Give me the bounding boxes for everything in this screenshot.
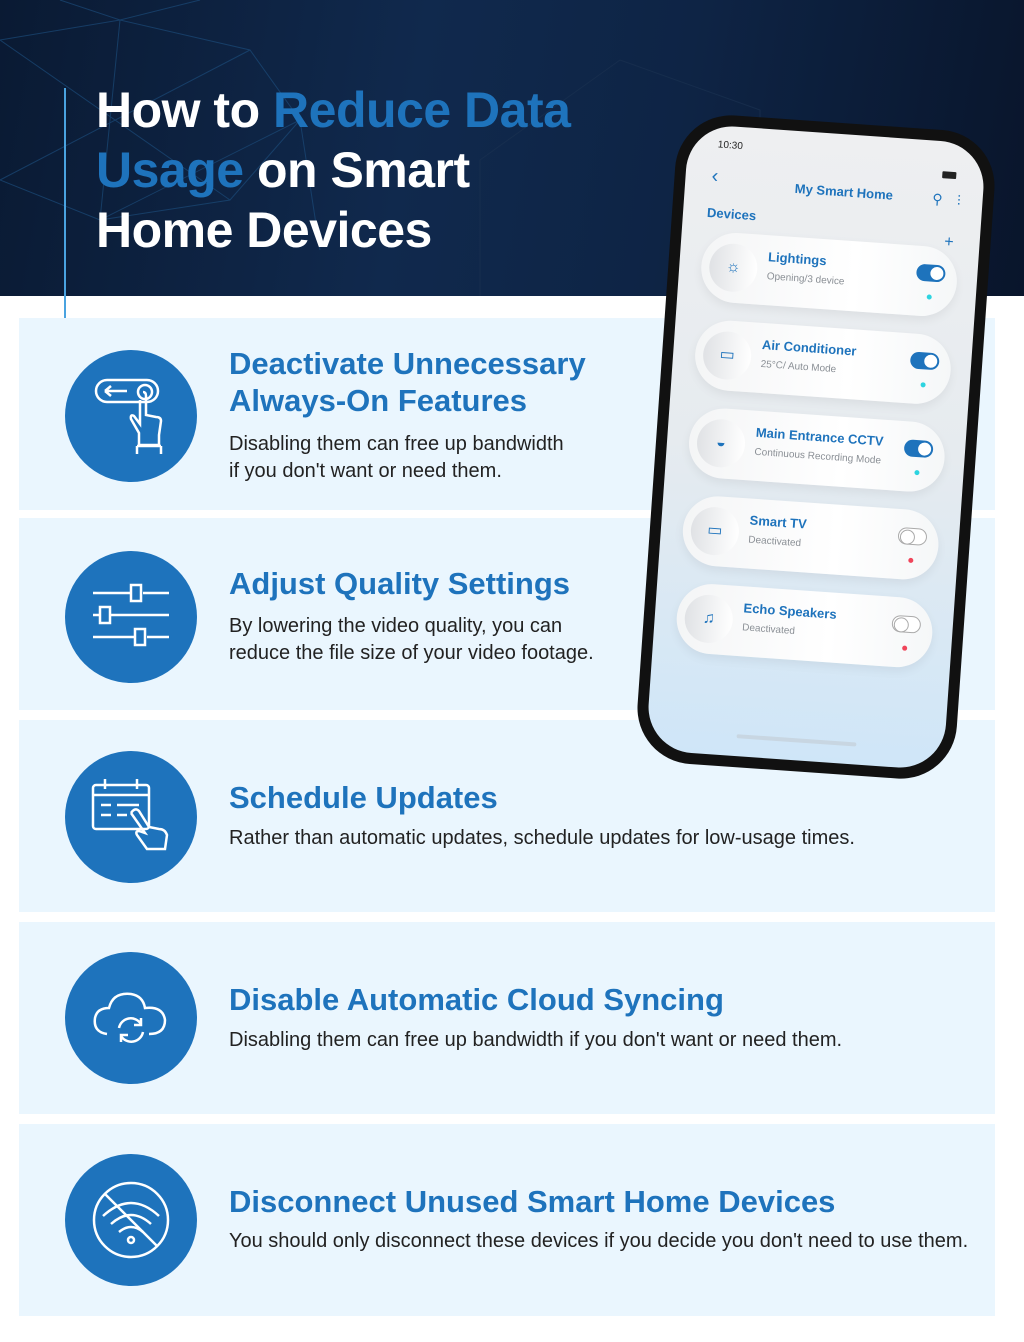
title: [96, 82, 572, 258]
heading: Disconnect Unused Smart Home Devices: [229, 1184, 835, 1219]
device cards: ☼: [725, 258, 741, 276]
device cards: Opening/3 device: [766, 271, 845, 288]
panel: quality settings: [19, 518, 995, 710]
panel: disconnect devices: [19, 1124, 995, 1316]
timeline line: [64, 88, 66, 328]
phone mockup: ▭: [719, 346, 735, 364]
phone mockup: Deactivated: [748, 535, 801, 549]
title: Usage on Smart: [96, 142, 470, 198]
text: Disabling them can free up bandwidth if you don't want or need them.: [229, 1029, 842, 1051]
phone mockup: My Smart Home: [794, 181, 893, 203]
text: By lowering the video quality, you can: [229, 615, 562, 637]
icon: no wifi: [65, 1154, 197, 1286]
phone mockup: ▭: [707, 522, 723, 540]
icon: calendar hand: [65, 751, 197, 883]
title: How to Reduce Data: [96, 82, 570, 138]
panel: schedule updates: [19, 720, 995, 912]
phone mockup: Deactivated: [742, 622, 795, 637]
phone mockup: +: [944, 233, 954, 251]
text: if you don't want or need them.: [229, 460, 502, 482]
device cards: Lightings: [768, 249, 827, 268]
header background: [0, 0, 1024, 296]
phone mockup: Smart TV: [749, 513, 807, 532]
phone mockup: Devices: [707, 205, 757, 223]
title: Home Devices: [96, 202, 432, 258]
status bar: 10:30: [717, 139, 743, 152]
heading: [229, 346, 586, 418]
text: Rather than automatic updates, schedule updates for low-usage times.: [229, 827, 855, 849]
heading: Schedule Updates: [229, 780, 498, 815]
phone mockup: [634, 112, 998, 782]
icon: cloud sync: [65, 952, 197, 1084]
panel: deactivate features: [19, 318, 995, 510]
phone mockup: Continuous Recording Mode: [754, 447, 881, 467]
heading: Always-On Features: [229, 383, 527, 418]
icon: hand toggle: [65, 350, 197, 482]
phone mockup: ⫶: [956, 192, 961, 208]
text: You should only disconnect these devices if you decide you don't need to use them.: [229, 1230, 968, 1252]
heading: Adjust Quality Settings: [229, 566, 570, 601]
heading: Deactivate Unnecessary: [229, 346, 586, 381]
text: [229, 433, 564, 482]
panel: cloud syncing: [19, 922, 995, 1114]
text: Disabling them can free up bandwidth: [229, 433, 564, 455]
text: reduce the file size of your video footage.: [229, 642, 594, 664]
device cards: [699, 231, 959, 318]
heading: Disable Automatic Cloud Syncing: [229, 982, 724, 1017]
text: [229, 615, 594, 664]
phone mockup: Echo Speakers: [743, 600, 837, 622]
phone mockup: ◒: [716, 434, 726, 452]
phone mockup: Main Entrance CCTV: [755, 425, 884, 449]
phone mockup: Air Conditioner: [761, 337, 857, 359]
icon: sliders: [65, 551, 197, 683]
phone mockup: ♫: [702, 610, 715, 627]
app header: ‹: [711, 165, 719, 187]
phone mockup: ⚲: [932, 191, 943, 207]
phone mockup: 25°C/ Auto Mode: [760, 359, 837, 375]
